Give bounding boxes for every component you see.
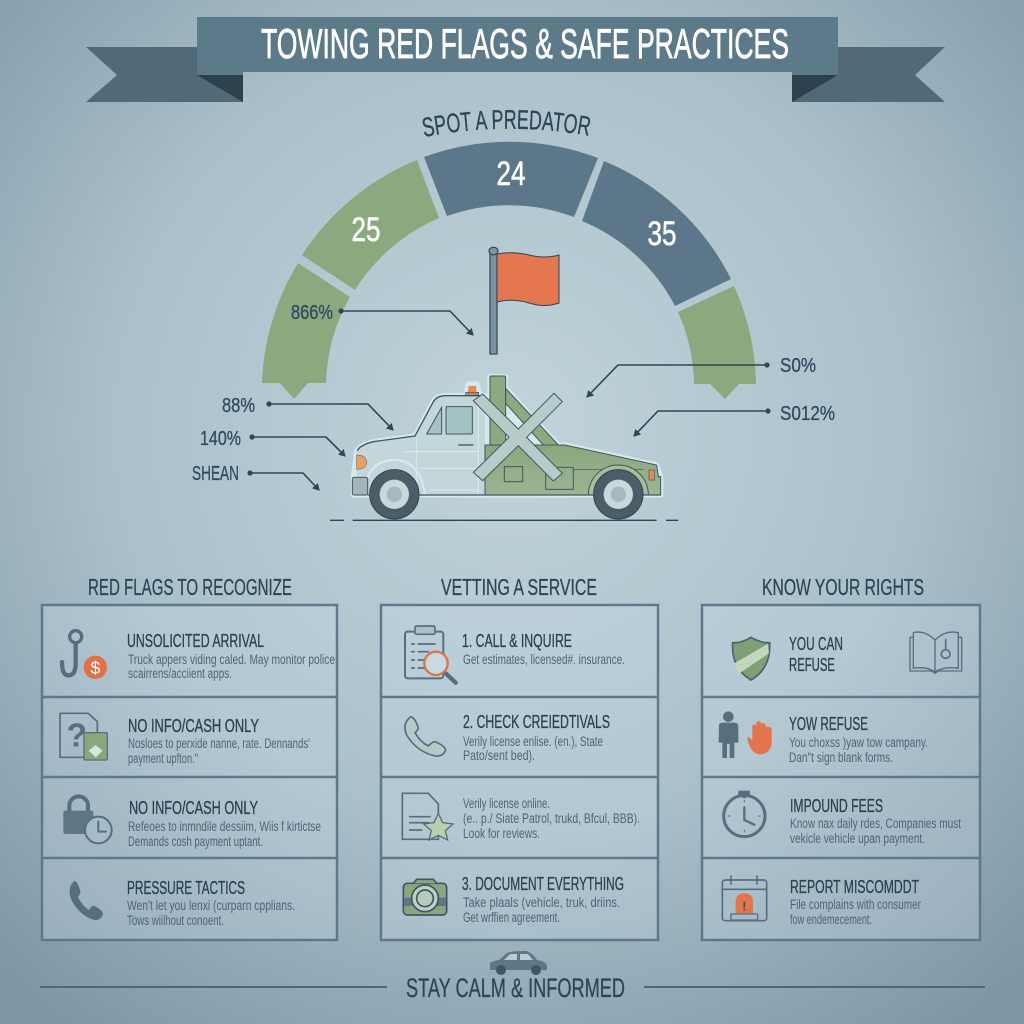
- callout: SHEAN: SHEAN: [192, 463, 239, 485]
- panel: vetting: [381, 605, 658, 940]
- item: no info 1: [128, 715, 310, 766]
- gauge segment: 25: 25: [352, 211, 380, 249]
- gauge segment: 24: [424, 142, 598, 217]
- title banner: [86, 17, 945, 102]
- item: impound fees: Know nax daily rdes, Companies must: [790, 816, 961, 831]
- item: you can refuse: REFUSE: [789, 654, 835, 675]
- callout: S012%: [634, 403, 835, 436]
- heading: rights: KNOW YOUR RIGHTS: [762, 574, 924, 600]
- icon: lock and clock: [63, 796, 112, 843]
- item: report: File complains with consumer: [790, 897, 921, 912]
- heading: red flags: RED FLAGS TO RECOGNIZE: [88, 574, 292, 600]
- icon: calendar alarm: !: [742, 899, 747, 914]
- item: no info 1: NO INFO/CASH ONLY: [128, 715, 259, 736]
- item: no info 1: Nosloes to perxide nanne, rate. Dennands': [128, 736, 310, 751]
- footer: [40, 951, 985, 1003]
- item: impound fees: vekicle vehicle upan payment.: [790, 831, 925, 846]
- icon: person and stop hand: [719, 711, 772, 758]
- item: no info 2: Refeoes to inmndile dessiim, Wiis f kirtictse: [128, 819, 321, 834]
- item: impound fees: [790, 795, 961, 846]
- gauge chart: [262, 142, 756, 399]
- icon: camera: [403, 879, 447, 915]
- item: verify: Verily license online.: [463, 796, 550, 811]
- item: yow refuse: [789, 713, 928, 765]
- item: pressure tactics: Wen't let you lenxi (curparn cpplians.: [127, 898, 295, 913]
- icon: document star: [402, 793, 453, 840]
- gauge segment: right green: [678, 286, 756, 399]
- item: you can refuse: [789, 633, 843, 675]
- item: call: [462, 630, 625, 667]
- footer message: STAY CALM & INFORMED: [406, 973, 625, 1003]
- gauge heading: SPOT A PREDATOR: [422, 110, 590, 136]
- item: yow refuse: Dan"t sign blank forms.: [789, 750, 893, 765]
- item: pressure tactics: PRESSURE TACTICS: [127, 877, 245, 898]
- callout: S0%: [587, 355, 816, 397]
- icon: clipboard magnifier: [405, 626, 456, 683]
- icon: document question: [60, 713, 107, 760]
- gauge segment: 24: 24: [496, 155, 526, 193]
- item: no info 1: payment upfton.": [128, 751, 198, 766]
- item: no info 2: Demands cosh payment uptant.: [128, 834, 263, 849]
- gauge heading: [422, 110, 590, 136]
- item: report: fow endemecement.: [790, 912, 872, 927]
- item: verify: (e.. p./ Siate Patrol, trukd, Bfcul, BBB).: [463, 811, 640, 826]
- item: yow refuse: YOW REFUSE: [789, 713, 868, 734]
- item: you can refuse: YOU CAN: [789, 633, 843, 654]
- icon: book: [910, 632, 962, 673]
- item: credentials: Verily license enlise. (en.), State: [463, 734, 603, 749]
- item: document: Get wrffien agreement.: [463, 910, 560, 925]
- item: unsolicited arrival: [127, 630, 335, 681]
- item: yow refuse: You choxss )yaw tow campany.: [789, 735, 928, 750]
- item: unsolicited arrival: scairrens/acciient apps.: [128, 666, 232, 681]
- item: credentials: [463, 711, 610, 763]
- callout: S0%: S0%: [780, 355, 816, 377]
- gauge segment: left green: [262, 263, 350, 399]
- gauge segment: 25: [302, 160, 439, 290]
- item: credentials: Pato/sent bed).: [463, 748, 535, 763]
- item: document: Take plaals (vehicle, truk, driins.: [463, 895, 620, 910]
- panel: rights: [702, 605, 980, 940]
- item: verify: [463, 796, 640, 841]
- callout: top left percent: [291, 302, 473, 335]
- item: report: REPORT MISCOMDDT: [790, 876, 919, 897]
- tow truck illustration: [330, 376, 678, 520]
- item: no info 2: [128, 797, 321, 849]
- icon: hook and dollar: [62, 631, 107, 679]
- callout: 88%: [222, 395, 393, 430]
- panel: red flags: [42, 605, 337, 940]
- callout: SHEAN: [192, 463, 319, 490]
- item: no info 2: NO INFO/CASH ONLY: [129, 797, 258, 818]
- item: document: 3. DOCUMENT EVERYTHING: [462, 873, 624, 894]
- item: unsolicited arrival: Truck appers viding caled. May monitor police: [128, 652, 335, 667]
- item: impound fees: IMPOUND FEES: [790, 795, 883, 816]
- callout: 88%: 88%: [222, 395, 255, 417]
- item: document: [462, 873, 624, 925]
- icons: rights: [719, 632, 962, 921]
- gauge segment: 35: [582, 161, 731, 306]
- icon: document question: ?: [66, 718, 87, 755]
- item: pressure tactics: [127, 877, 295, 928]
- gauge segment: 35: 35: [648, 215, 676, 253]
- icon: shield: [733, 637, 770, 680]
- callout: S012%: S012%: [780, 403, 835, 425]
- icon: hook and dollar: $: [90, 658, 100, 678]
- icon: phone outline: [405, 717, 446, 756]
- item: report: [790, 876, 921, 927]
- icons: vetting: [402, 626, 456, 915]
- callout: top left percent: 866%: [291, 302, 333, 324]
- item: unsolicited arrival: UNSOLICITED ARRIVAL: [127, 630, 264, 651]
- item: verify: Look for reviews.: [463, 826, 540, 841]
- heading: vetting: VETTING A SERVICE: [441, 574, 597, 600]
- icon: phone: [70, 881, 103, 920]
- item: call: 1. CALL & INQUIRE: [462, 630, 572, 651]
- item: pressure tactics: Tows wiilhout conoent.: [127, 913, 224, 928]
- item: call: Get estimates, licensed#. insurance.: [463, 652, 625, 667]
- icon: car: [490, 951, 547, 975]
- callout: 140%: [200, 428, 345, 456]
- callout: 140%: 140%: [200, 428, 241, 450]
- icons: red flags: [60, 631, 112, 920]
- icon: calendar alarm: [722, 876, 767, 921]
- item: credentials: 2. CHECK CREIEDTIVALS: [463, 711, 610, 732]
- icon: red flag: [489, 247, 559, 354]
- icon: stopwatch: [724, 791, 765, 837]
